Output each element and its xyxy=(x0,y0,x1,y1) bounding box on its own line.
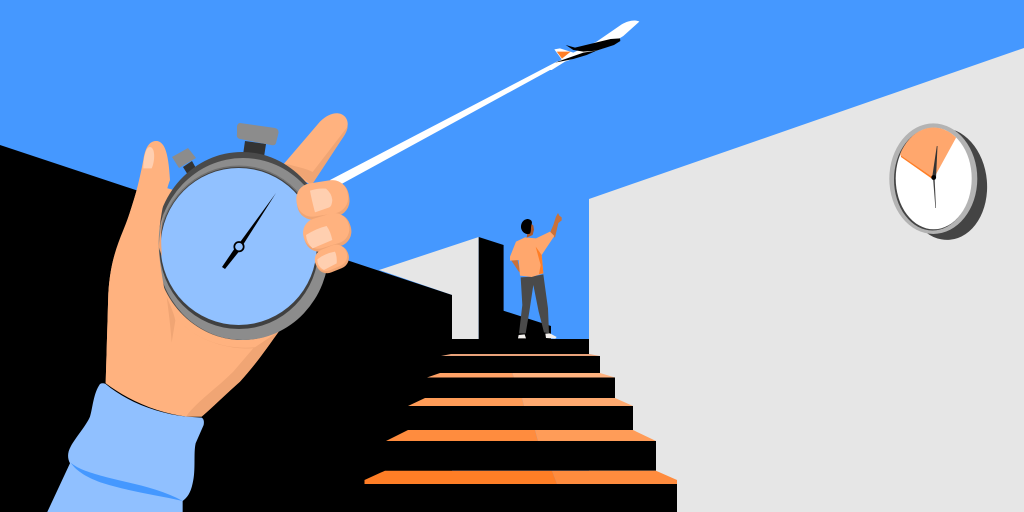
finger 2 xyxy=(299,209,355,256)
back finger xyxy=(280,113,348,185)
palm shadow xyxy=(180,322,278,417)
minute hand xyxy=(932,146,938,178)
person looking up xyxy=(510,213,562,339)
dark tower xyxy=(479,237,551,339)
time sector xyxy=(900,128,956,179)
second hand xyxy=(933,178,936,208)
clock face xyxy=(896,128,972,229)
head hair xyxy=(521,219,532,234)
right wall xyxy=(589,48,1024,512)
wing xyxy=(566,38,620,52)
clock bezel xyxy=(889,123,977,234)
step 2 xyxy=(410,373,615,398)
hand and stopwatch xyxy=(47,113,355,512)
clock inner rim xyxy=(894,128,971,230)
stopwatch hands xyxy=(222,193,276,269)
step 4 xyxy=(370,430,656,471)
sleeve crease xyxy=(71,463,183,501)
step 3 xyxy=(390,398,633,430)
clock xyxy=(889,123,988,240)
shirt shadow xyxy=(536,247,543,274)
sleeve xyxy=(47,383,204,512)
lower stabiliser xyxy=(555,51,597,63)
tail fin xyxy=(557,52,571,59)
thumb xyxy=(106,141,175,383)
clock hub xyxy=(931,175,936,180)
left black wall xyxy=(0,145,452,512)
trousers xyxy=(519,274,549,333)
raised forearm xyxy=(549,213,562,238)
shirt xyxy=(510,232,554,277)
fuselage xyxy=(547,21,639,70)
finger 3 xyxy=(312,241,352,277)
step 5 xyxy=(350,471,677,512)
neck and face xyxy=(527,222,534,238)
finger 1 xyxy=(294,178,352,222)
stopwatch case xyxy=(155,152,329,340)
fingers xyxy=(294,178,355,277)
shoes xyxy=(518,333,557,339)
thumb crease xyxy=(167,297,175,343)
back wall xyxy=(379,237,479,339)
stopwatch side button xyxy=(172,148,197,175)
hip arm xyxy=(511,259,521,273)
step 1 xyxy=(430,354,600,374)
top landing xyxy=(451,339,589,354)
staircase xyxy=(350,339,677,512)
airplane xyxy=(547,21,639,70)
thumb nail xyxy=(143,147,154,168)
clock body depth xyxy=(898,125,992,243)
palm xyxy=(106,180,280,417)
stopwatch top button xyxy=(237,123,279,157)
stopwatch face xyxy=(161,168,317,325)
contrail xyxy=(330,61,561,187)
